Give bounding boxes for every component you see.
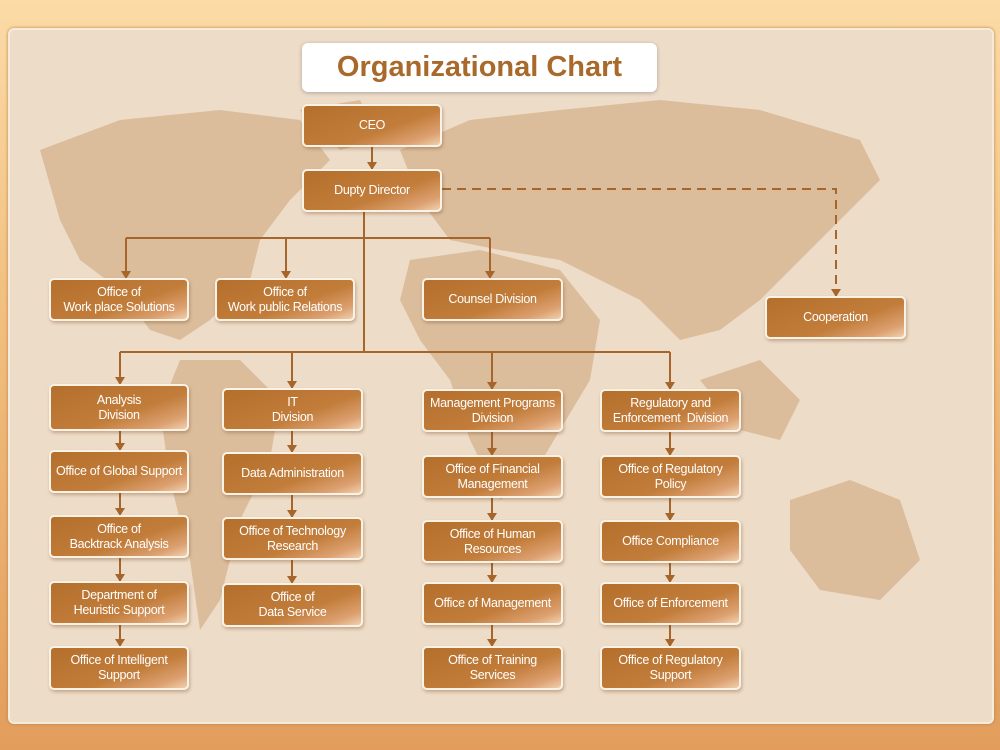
box: Support [98, 668, 140, 682]
box: Management [458, 476, 527, 490]
column: analysis: Analysis [97, 392, 141, 406]
title: Organizational Chart [337, 51, 622, 83]
box: public relations: Office of [263, 284, 307, 298]
box: Resources [464, 542, 521, 556]
column: analysis [49, 384, 189, 431]
box: CEO: CEO [359, 118, 385, 132]
box: Data Service [259, 605, 326, 619]
box: workplace solutions: Office of [97, 284, 141, 298]
box [49, 646, 189, 690]
box: public relations [215, 278, 355, 321]
box: workplace solutions: Work place Solutions [63, 300, 175, 314]
box [422, 455, 563, 498]
column: management [422, 389, 563, 432]
column: IT [222, 388, 363, 431]
box: public relations: Work public Relations [228, 300, 342, 314]
column: regulatory: Enforcement Division [613, 410, 728, 424]
column: regulatory [600, 389, 741, 432]
box: Office of [271, 590, 314, 604]
box [600, 520, 741, 563]
box: Office of Training [448, 653, 537, 667]
column: IT: Division [272, 410, 313, 424]
box: Office of Human [450, 526, 535, 540]
box: Services [470, 668, 515, 682]
box: Office Compliance [622, 534, 719, 548]
box: Research [267, 538, 318, 552]
box: Office of Technology [239, 524, 346, 538]
box: Dupty Director [302, 169, 442, 212]
box: Office of Regulatory [618, 462, 723, 476]
box: Dupty Director: Dupty Director [334, 183, 410, 197]
box [600, 646, 741, 690]
box [49, 515, 189, 558]
title [302, 43, 657, 92]
box: Office of Regulatory [618, 653, 723, 667]
column: analysis: Division [98, 408, 140, 422]
box: Office of [97, 522, 141, 536]
box [422, 646, 563, 690]
box [600, 582, 741, 625]
column: management: Division [472, 410, 513, 424]
column: regulatory: Regulatory and [630, 396, 711, 410]
box: counsel: Counsel Division [448, 292, 537, 306]
box: Office of Global Support [56, 464, 182, 478]
box: Office of Management [434, 596, 551, 610]
box [49, 450, 189, 493]
box [422, 582, 563, 625]
box [422, 520, 563, 563]
box: Backtrack Analysis [70, 536, 168, 550]
box: Office of Financial [445, 462, 540, 476]
box [222, 452, 363, 495]
box [222, 517, 363, 560]
box: counsel [422, 278, 563, 321]
box: CEO [302, 104, 442, 147]
box: Data Administration [241, 466, 344, 480]
box [600, 455, 741, 498]
box: workplace solutions [49, 278, 189, 321]
box [49, 581, 189, 625]
box: Office of Intelligent [70, 653, 168, 667]
box: Policy [655, 476, 686, 490]
box: Department of [81, 588, 157, 602]
column: management: Management Programs [430, 396, 555, 410]
box: Office of Enforcement [613, 596, 728, 610]
box: Heuristic Support [74, 603, 164, 617]
box: cooperation [765, 296, 906, 339]
box: Support [650, 668, 691, 682]
box [222, 583, 363, 627]
column: IT: IT [287, 394, 298, 408]
box: cooperation: Cooperation [803, 310, 868, 324]
